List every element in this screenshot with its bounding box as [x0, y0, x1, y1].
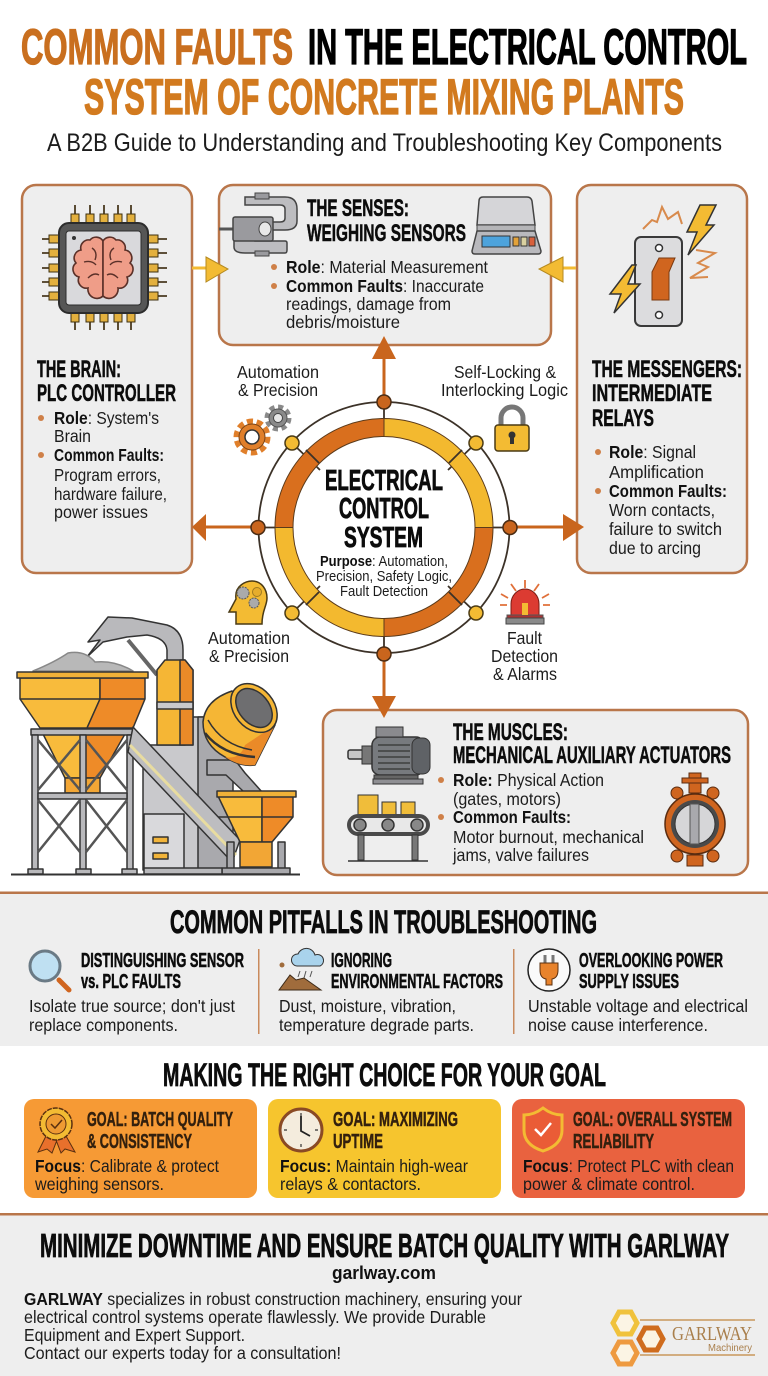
left hopper upper [20, 678, 100, 728]
mixer support [207, 760, 262, 792]
heading [579, 950, 723, 993]
icon: gears [236, 407, 289, 452]
ring chart [251, 395, 517, 661]
gravel pile [33, 652, 133, 671]
text: purpose: Precision, Safety Logic, [316, 568, 452, 585]
text: brain role and faults: Role: System's [54, 408, 159, 428]
heading: the messengers: RELAYS [592, 405, 654, 432]
heading: the senses: THE SENSES: [307, 195, 409, 222]
icon: relay switch with sparks [610, 205, 716, 326]
icon: electric motor [348, 727, 430, 784]
heading: UPTIME [333, 1131, 383, 1153]
right hopper [218, 796, 262, 842]
description [528, 996, 748, 1035]
icon: load cell sensor [219, 193, 297, 256]
label: automation and precision, top: & Precision [238, 380, 318, 400]
description: Dust, moisture, vibration, [279, 996, 456, 1016]
arrow: right to messengers [516, 514, 584, 541]
text: muscles role and faults: Common Faults: [453, 807, 571, 827]
heading [81, 950, 244, 993]
label: automation and precision, bottom: Automation [208, 628, 290, 648]
text: company description: GARLWAY specializes in robust construction machinery, ensuring your [24, 1289, 522, 1309]
text: muscles role and faults: (gates, motors) [453, 789, 561, 809]
heading: the senses: WEIGHING SENSORS [307, 220, 466, 247]
icon: power plug [528, 949, 570, 991]
frame [28, 729, 137, 874]
description: Focus: Maintain high-wear [280, 1156, 468, 1176]
logo: garlway machinery: GARLWAY [672, 1323, 752, 1345]
heading: IGNORING [331, 950, 392, 972]
label: fault detection and alarms: Detection [491, 646, 558, 666]
card: maximizing uptime [268, 1099, 501, 1198]
text: muscles role and faults: Motor burnout, mechanical [453, 827, 644, 847]
panel: the brain [22, 185, 192, 573]
icon: PLC chip with brain [42, 205, 167, 330]
pitfall: sensor vs PLC [29, 950, 244, 1035]
heading: ENVIRONMENTAL FACTORS [331, 971, 503, 993]
label: fault detection and alarms: & Alarms [493, 664, 557, 684]
description: weighing sensors. [34, 1174, 164, 1194]
description [34, 1156, 219, 1194]
conveyor belt [128, 727, 240, 862]
heading: DISTINGUISHING SENSOR [81, 950, 244, 972]
icon: weather and dust [279, 948, 324, 990]
heading: electrical control system: ELECTRICAL [325, 465, 443, 497]
description: Unstable voltage and electrical [528, 996, 748, 1016]
heading [333, 1109, 458, 1153]
text: senses role and faults: Common Faults: Inaccurate [286, 276, 484, 296]
pitfall: power supply [528, 949, 748, 1035]
heading: the muscles: THE MUSCLES: [453, 719, 568, 746]
heading: electrical control system: CONTROL [339, 493, 429, 525]
heading: the messengers [592, 356, 742, 432]
text: brain role and faults [38, 408, 167, 522]
description [523, 1156, 734, 1194]
icon: alarm beacon [500, 580, 550, 624]
section: call to action [0, 1213, 768, 1376]
heading: RELIABILITY [573, 1131, 654, 1153]
icon: clock [280, 1109, 322, 1151]
text: brain role and faults: Common Faults: [54, 445, 164, 465]
icon: head with gears [229, 581, 267, 624]
label: self-locking logic: Interlocking Logic [441, 380, 568, 400]
label: self-locking logic: Self-Locking & [454, 362, 556, 382]
text: company description: Equipment and Expert Support. [24, 1325, 245, 1345]
heading: the brain [37, 356, 176, 407]
text: muscles role and faults [438, 770, 644, 865]
description: temperature degrade parts. [279, 1015, 474, 1035]
text: brain role and faults: hardware failure, [54, 484, 167, 504]
heading: GOAL: BATCH QUALITY [87, 1109, 233, 1131]
heading: the brain: PLC CONTROLLER [37, 380, 176, 407]
panel: the messengers [577, 185, 747, 573]
card: batch quality [24, 1099, 257, 1198]
description: noise cause interference. [528, 1015, 708, 1035]
label: fault detection and alarms: Fault [507, 628, 542, 648]
heading: the messengers: INTERMEDIATE [592, 380, 712, 407]
icon: digital scale [472, 197, 541, 254]
label: automation and precision, bottom [208, 628, 290, 666]
section: common pitfalls [0, 892, 768, 1046]
heading: the muscles [453, 719, 731, 769]
text: purpose: Purpose: Automation, [320, 553, 448, 570]
text: senses role and faults [271, 257, 488, 332]
arrow: down to muscles [372, 660, 396, 718]
text: purpose [316, 553, 452, 600]
icon: padlock [495, 407, 529, 451]
text: brain role and faults: power issues [54, 502, 148, 522]
text: muscles role and faults: jams, valve failures [452, 845, 589, 865]
description: replace components. [29, 1015, 178, 1035]
icon: shield [524, 1108, 562, 1151]
text: company description: electrical control systems operate flawlessly. We provide Durable [24, 1307, 486, 1327]
heading: & CONSISTENCY [87, 1131, 192, 1153]
text: messengers role and faults: Common Faults: [609, 481, 727, 501]
description [279, 996, 474, 1035]
heading: the senses [307, 195, 466, 247]
text: senses role and faults: debris/moisture [286, 312, 400, 332]
yellow arrow: brain to senses [192, 257, 228, 282]
icon: award badge [38, 1108, 75, 1153]
text: senses role and faults: readings, damage from [286, 294, 451, 314]
heading: electrical control system: SYSTEM [344, 522, 423, 554]
silo column [157, 660, 193, 745]
title: COMMON FAULTS [21, 19, 293, 75]
pitfall: environmental factors [279, 948, 503, 1035]
website: garlway.com [332, 1263, 436, 1283]
text: senses role and faults: Role: Material Measurement [286, 257, 488, 277]
heading: the brain: THE BRAIN: [37, 356, 121, 383]
heading: electrical control system [325, 465, 443, 554]
description [29, 996, 235, 1035]
panel: the senses [219, 185, 551, 345]
arrow: up to senses [372, 336, 396, 395]
arrow: left to brain [192, 514, 252, 541]
text: company description [24, 1289, 522, 1363]
description: Focus: Calibrate & protect [35, 1156, 219, 1176]
description [280, 1156, 468, 1194]
heading: GOAL: MAXIMIZING [333, 1109, 458, 1131]
panel: the muscles [323, 710, 748, 875]
mixer tower [143, 717, 205, 870]
description: power & climate control. [523, 1174, 695, 1194]
mixer drum [203, 691, 275, 765]
text: messengers role and faults: failure to switch [609, 519, 722, 539]
illustration: concrete mixing plant [11, 617, 300, 874]
heading: vs. PLC FAULTS [81, 971, 181, 993]
text: messengers role and faults [595, 442, 727, 558]
text: company description: Contact our experts today for a consultation! [24, 1343, 341, 1363]
label: automation and precision, top: Automation [237, 362, 319, 382]
yellow arrow: messengers to senses [539, 257, 576, 282]
section: right choice [24, 1057, 745, 1198]
description: relays & contactors. [280, 1174, 421, 1194]
card: system reliability [512, 1099, 745, 1198]
duct [87, 617, 183, 662]
label: automation and precision, top [237, 362, 319, 400]
text: messengers role and faults: Role: Signal [609, 442, 696, 462]
label: self-locking logic [441, 362, 568, 400]
text: messengers role and faults: due to arcing [609, 538, 701, 558]
description: Isolate true source; don't just [29, 996, 235, 1016]
logo: garlway machinery [613, 1312, 755, 1364]
text: muscles role and faults: Role: Physical Action [453, 770, 604, 790]
heading: SUPPLY ISSUES [579, 971, 679, 993]
text: brain role and faults: Program errors, [54, 465, 161, 485]
heading [331, 950, 503, 993]
text: messengers role and faults: Amplification [609, 462, 704, 482]
icon: butterfly valve [665, 773, 725, 866]
logo: garlway machinery: Machinery [708, 1343, 752, 1354]
text: messengers role and faults: Worn contacts, [609, 500, 715, 520]
label: fault detection and alarms [491, 628, 558, 684]
label: automation and precision, bottom: & Precision [209, 646, 289, 666]
icon: magnifier [30, 951, 69, 990]
heading [87, 1109, 233, 1153]
central hub: electrical control system [192, 336, 584, 718]
title [21, 19, 747, 125]
heading [573, 1109, 732, 1153]
icon: conveyor with boxes [348, 795, 428, 861]
left hopper lower [43, 734, 85, 778]
description: Focus: Protect PLC with clean [523, 1156, 734, 1176]
text: purpose: Fault Detection [340, 583, 428, 600]
text: brain role and faults: Brain [54, 426, 91, 446]
